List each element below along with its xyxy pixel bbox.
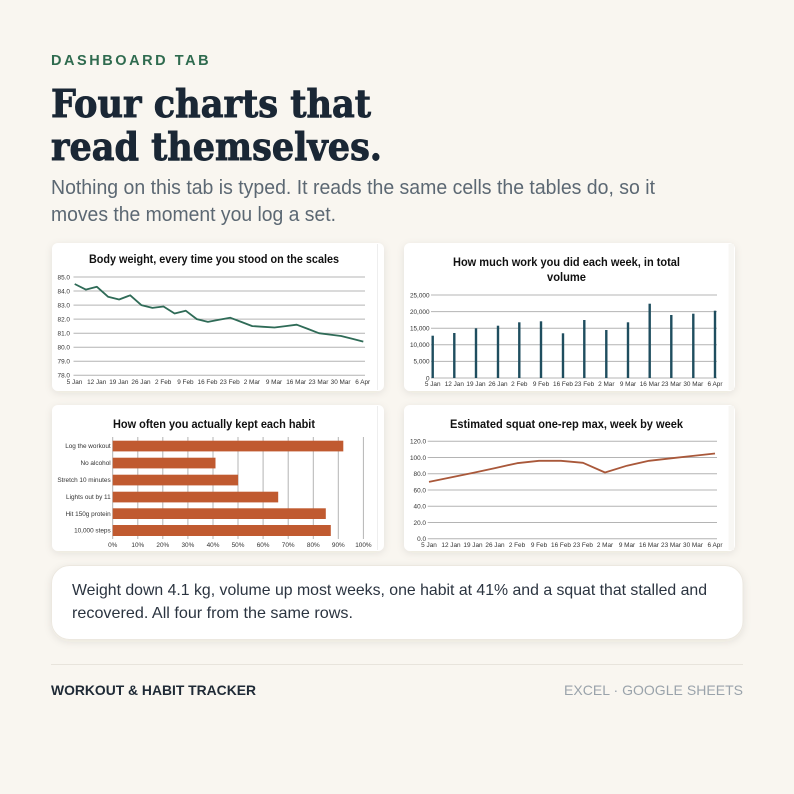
y axis labels: 40.0 xyxy=(414,504,426,510)
y axis labels: 0 xyxy=(426,375,430,382)
x axis labels: 5 Jan xyxy=(425,381,441,388)
habit labels: No alcohol xyxy=(80,460,111,467)
x axis labels: 5 Jan xyxy=(421,542,437,549)
y axis labels xyxy=(410,439,426,543)
habit bars xyxy=(113,441,343,536)
percent axis labels: 50% xyxy=(232,542,245,549)
x axis labels xyxy=(67,379,371,386)
footer: product name: WORKOUT & HABIT TRACKER xyxy=(51,682,256,698)
y axis labels: 85.0 xyxy=(58,274,70,281)
x axis labels: 30 Mar xyxy=(331,379,351,386)
x axis labels: 5 Jan xyxy=(67,379,83,386)
x axis labels: 16 Mar xyxy=(640,381,661,388)
x axis labels: 9 Mar xyxy=(619,542,636,549)
subtitle: Nothing on this tab is typed. It reads the same cells the tables do, so it xyxy=(51,177,655,199)
x axis labels: 16 Feb xyxy=(553,381,573,388)
x axis labels: 19 Jan xyxy=(466,381,486,388)
y axis labels: 80.0 xyxy=(414,471,426,478)
percent axis labels: 70% xyxy=(282,542,295,549)
x axis labels: 26 Jan xyxy=(131,379,151,386)
weight line xyxy=(75,284,363,342)
x axis labels: 2 Mar xyxy=(244,379,261,386)
y axis labels: 0.0 xyxy=(417,536,426,543)
percent axis labels: 90% xyxy=(332,542,345,549)
y axis labels: 100.0 xyxy=(410,455,426,462)
callout: recovered. All four from the same rows. xyxy=(72,605,353,622)
habit labels: Hit 150g protein xyxy=(66,511,111,518)
x axis labels: 16 Feb xyxy=(198,379,218,386)
y axis labels: 84.0 xyxy=(58,288,70,295)
habit labels xyxy=(57,443,111,535)
callout xyxy=(52,566,743,640)
percent axis labels: 0% xyxy=(108,542,118,549)
x axis labels: 16 Mar xyxy=(286,379,307,386)
title: read themselves. xyxy=(51,124,382,169)
chart title: weekly volume: How much work you did each week, in total xyxy=(453,255,680,269)
title: Four charts that xyxy=(51,81,371,126)
percent axis labels: 40% xyxy=(207,542,220,549)
y axis labels: 120.0 xyxy=(410,439,426,446)
x axis labels: 2 Feb xyxy=(509,542,526,549)
percent axis labels: 80% xyxy=(307,542,320,549)
habit labels: Lights out by 11 xyxy=(66,494,111,501)
x axis labels: 9 Feb xyxy=(177,379,194,386)
y axis labels: 10,000 xyxy=(410,342,430,349)
x axis labels: 6 Apr xyxy=(708,381,723,388)
x axis labels: 30 Mar xyxy=(683,542,704,549)
x axis labels: 23 Feb xyxy=(220,379,240,386)
y axis labels: 82.0 xyxy=(58,316,70,323)
y axis labels: 25,000 xyxy=(410,292,430,299)
y axis labels: 81.0 xyxy=(58,330,70,338)
y axis labels: 80.0 xyxy=(58,344,70,352)
x axis labels: 23 Mar xyxy=(661,542,682,549)
x axis labels: 2 Feb xyxy=(511,381,528,388)
x axis labels: 12 Jan xyxy=(87,379,107,386)
y axis labels: 15,000 xyxy=(410,326,430,332)
y axis labels: 20,000 xyxy=(410,309,430,316)
x axis labels: 19 Jan xyxy=(463,542,483,549)
y axis labels xyxy=(58,274,70,380)
x axis labels: 9 Feb xyxy=(533,381,550,388)
x axis labels: 19 Jan xyxy=(109,379,129,386)
panel: habit chart xyxy=(52,405,384,551)
y axis labels: 78.0 xyxy=(58,373,70,380)
x axis labels: 23 Mar xyxy=(308,379,329,386)
x axis labels: 26 Jan xyxy=(485,542,505,549)
y axis labels: 5,000 xyxy=(414,359,430,366)
x axis labels xyxy=(421,542,723,549)
y axis labels: 20.0 xyxy=(414,520,426,527)
y axis labels: 83.0 xyxy=(58,302,70,309)
callout: Weight down 4.1 kg, volume up most weeks, one habit at 41% and a squat that stalled and xyxy=(72,582,707,599)
x axis labels: 6 Apr xyxy=(708,542,723,549)
x axis labels: 6 Apr xyxy=(355,379,371,386)
habit labels: Stretch 10 minutes xyxy=(57,477,111,484)
habit labels: Log the workout xyxy=(65,443,111,450)
squat line xyxy=(429,454,715,482)
title xyxy=(51,81,382,169)
volume bars xyxy=(432,304,716,378)
x axis labels: 16 Mar xyxy=(639,542,660,549)
chart title: body weight: Body weight, every time you stood on the scales xyxy=(89,252,339,266)
percent axis labels: 20% xyxy=(156,542,170,549)
x axis labels: 9 Mar xyxy=(266,379,283,386)
x axis labels: 26 Jan xyxy=(488,381,508,388)
panel: squat chart xyxy=(404,405,735,551)
x axis labels: 2 Feb xyxy=(155,379,172,386)
eyebrow: DASHBOARD TAB xyxy=(51,53,211,69)
subtitle: moves the moment you log a set. xyxy=(51,204,336,226)
subtitle xyxy=(51,177,655,226)
x axis labels: 16 Feb xyxy=(551,542,571,549)
x axis labels: 23 Feb xyxy=(573,542,593,549)
chart title: weekly volume xyxy=(453,255,680,284)
x axis labels: 12 Jan xyxy=(441,542,461,549)
panel: weekly volume chart xyxy=(404,243,735,391)
x axis labels: 2 Mar xyxy=(597,542,614,549)
x axis labels: 30 Mar xyxy=(683,381,704,388)
percent axis labels: 10% xyxy=(131,542,145,549)
habit labels: 10,000 steps xyxy=(74,528,111,535)
footer: formats: EXCEL · GOOGLE SHEETS xyxy=(564,682,743,698)
percent axis labels: 60% xyxy=(257,542,270,549)
percent axis labels: 30% xyxy=(182,542,195,549)
percent axis labels: 100% xyxy=(355,542,372,549)
y axis labels: 60.0 xyxy=(414,487,426,494)
x axis labels: 9 Feb xyxy=(531,542,548,549)
chart title: habits: How often you actually kept each habit xyxy=(113,417,315,431)
panel: body weight chart xyxy=(52,243,384,391)
x axis labels: 2 Mar xyxy=(598,381,615,388)
x axis labels: 23 Feb xyxy=(574,381,595,388)
y axis labels xyxy=(410,292,430,382)
chart title: weekly volume: volume xyxy=(547,270,586,284)
x axis labels: 12 Jan xyxy=(445,381,464,388)
chart title: squat: Estimated squat one-rep max, week by week xyxy=(450,417,683,431)
x axis labels xyxy=(425,381,723,388)
x axis labels: 9 Mar xyxy=(620,381,637,388)
y axis labels: 79.0 xyxy=(58,359,70,366)
x axis labels: 23 Mar xyxy=(661,381,682,388)
percent axis labels xyxy=(108,542,372,549)
